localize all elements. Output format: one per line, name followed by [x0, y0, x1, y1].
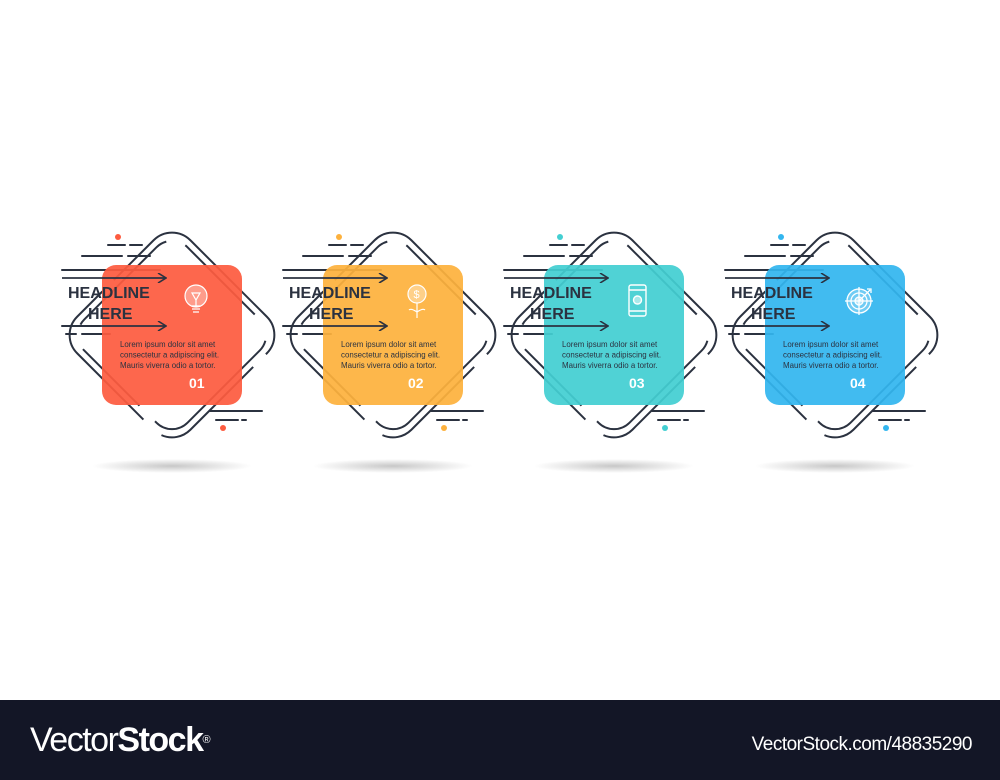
card 4: 04 — [850, 375, 866, 391]
footer logo: VectorStock® — [30, 721, 209, 759]
icon: target — [845, 287, 873, 315]
icon: dollar plant: $ — [414, 289, 420, 301]
card 1: Lorem ipsum dolor sit amet — [120, 340, 216, 349]
card 3 — [501, 222, 727, 473]
card 1: Mauris viverra odio a tortor. — [120, 361, 216, 370]
footer — [0, 700, 1000, 780]
card 1: HEADLINE — [68, 285, 150, 302]
card 1 — [59, 222, 285, 473]
card 4: HEADLINE — [731, 285, 813, 302]
icon: dollar plant — [408, 285, 426, 318]
card 3: Lorem ipsum dolor sit amet — [562, 340, 658, 349]
card 3: HERE — [530, 306, 575, 323]
card 3: 03 — [629, 375, 645, 391]
card 2: HERE — [309, 306, 354, 323]
card 1: 01 — [189, 375, 205, 391]
card 4: HERE — [751, 306, 796, 323]
card 4 — [722, 222, 948, 473]
card 3: consectetur a adipiscing elit. — [562, 350, 661, 360]
card 1: consectetur a adipiscing elit. — [120, 350, 219, 360]
icon: phone — [629, 285, 646, 316]
card 3: HEADLINE — [510, 285, 592, 302]
card 4: Mauris viverra odio a tortor. — [783, 361, 879, 370]
card 2: consectetur a adipiscing elit. — [341, 350, 440, 360]
card 2: Lorem ipsum dolor sit amet — [341, 340, 437, 349]
card 2: 02 — [408, 375, 424, 391]
card 1: HERE — [88, 306, 133, 323]
card 2: Mauris viverra odio a tortor. — [341, 361, 437, 370]
footer url: VectorStock.com/48835290 — [752, 734, 972, 755]
card 3: Mauris viverra odio a tortor. — [562, 361, 658, 370]
card 2 — [280, 222, 506, 473]
card 4: consectetur a adipiscing elit. — [783, 350, 882, 360]
icon: bulb — [185, 285, 207, 312]
card 2: HEADLINE — [289, 285, 371, 302]
card 4: Lorem ipsum dolor sit amet — [783, 340, 879, 349]
